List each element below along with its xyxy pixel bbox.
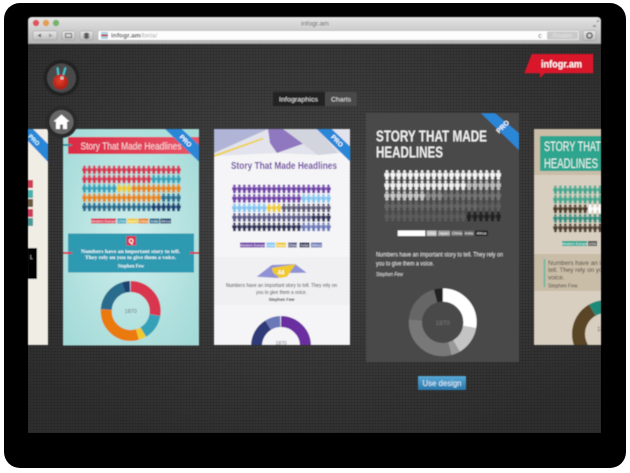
dark textured page background xyxy=(28,44,601,433)
legend: Japan xyxy=(127,220,137,224)
legend: Western Europe xyxy=(240,243,265,247)
PRO ribbon xyxy=(165,129,199,162)
quote block xyxy=(63,234,199,272)
home button xyxy=(46,106,78,138)
legend: Africa xyxy=(477,232,487,236)
back and forward buttons xyxy=(33,31,57,40)
polygon header art xyxy=(214,129,350,157)
legend: India xyxy=(151,220,158,224)
tab: Charts: Charts xyxy=(331,96,352,104)
donut chart, clipped xyxy=(250,316,312,346)
traffic light buttons xyxy=(33,20,59,26)
legend: Western Europe xyxy=(91,220,116,224)
share button xyxy=(62,31,75,40)
legend xyxy=(398,230,488,236)
PRO ribbon xyxy=(27,129,48,162)
template card: teal xyxy=(63,129,199,346)
template card: paper, cut off right xyxy=(533,128,602,346)
layers button xyxy=(80,31,93,40)
heading: STORY THAT MADE xyxy=(376,128,487,146)
use design button: Use design xyxy=(422,379,462,388)
people chart xyxy=(232,184,331,232)
browser chrome toolbar xyxy=(28,17,601,44)
legend: China xyxy=(288,243,297,247)
donut chart xyxy=(415,295,470,350)
connector to home xyxy=(63,144,72,146)
legend: USA xyxy=(118,220,126,224)
heading: STORY THAT xyxy=(544,139,601,154)
infogr.am red logo: infogr.am xyxy=(541,58,582,70)
heading: Story That Made Headlines xyxy=(80,140,182,152)
quote block: Stephen Few xyxy=(269,297,295,302)
quote block: tell. They rely on you to give xyxy=(548,267,627,274)
PRO ribbon: PRO xyxy=(178,134,193,149)
donut chart, clipped: 18 xyxy=(597,327,604,333)
legend: Japan xyxy=(439,232,449,236)
quote text: you to give them a voice. xyxy=(376,260,434,268)
legend xyxy=(91,218,171,224)
donut chart, clipped: 1870 xyxy=(275,341,287,347)
tab switcher xyxy=(273,92,357,106)
people chart xyxy=(384,170,502,222)
legend: Africa xyxy=(312,243,321,247)
PRO ribbon: PRO xyxy=(27,134,40,148)
quote block: Numbers have an important xyxy=(548,260,626,267)
legend: Japan xyxy=(276,243,286,247)
use design button xyxy=(418,376,466,390)
quote block: They rely on you to give them a voice. xyxy=(85,255,177,261)
quote block: Stephen Few xyxy=(548,284,578,290)
quote block: voice. xyxy=(548,274,565,282)
tab: Infographics: Infographics xyxy=(279,96,319,104)
legend: China xyxy=(139,220,148,224)
black tooltip tab: L xyxy=(30,255,33,261)
quote block: you to give them a voice. xyxy=(256,290,307,296)
address bar: Reader xyxy=(553,34,572,40)
legend: USA xyxy=(428,232,436,236)
black tooltip tab xyxy=(28,248,37,279)
people row fragments xyxy=(28,180,33,226)
settings button xyxy=(583,30,596,40)
people chart xyxy=(553,185,601,233)
legend: Africa xyxy=(161,220,170,224)
address bar xyxy=(98,30,579,40)
quote block: Numbers have an important story to tell. They rely on xyxy=(226,283,337,289)
legend: China xyxy=(452,232,463,236)
quote text xyxy=(376,252,503,278)
heading xyxy=(376,128,487,162)
PRO ribbon xyxy=(481,113,519,150)
partial template card far left xyxy=(27,129,48,345)
infogr.am red logo xyxy=(524,54,593,78)
PRO ribbon: PRO xyxy=(329,134,344,149)
legend: USA xyxy=(267,243,275,247)
PRO ribbon: PRO xyxy=(496,119,512,135)
legend: USA xyxy=(589,242,597,246)
PRO ribbon xyxy=(317,129,350,162)
template card: dark selected xyxy=(366,113,519,362)
legend xyxy=(240,242,322,248)
address bar: c xyxy=(538,33,542,40)
legend: Western Europe xyxy=(562,242,587,246)
app logo badge xyxy=(44,60,80,96)
quote block: Stephen Few xyxy=(118,264,145,270)
donut chart, clipped xyxy=(572,300,602,346)
quote block: Numbers have an important story to tell. xyxy=(81,249,181,255)
window title: infogr.am xyxy=(301,20,329,28)
address bar: infogr.am/beta/ xyxy=(111,32,157,40)
template card: white purple xyxy=(214,129,350,370)
legend: India xyxy=(465,232,474,236)
heading: Story That Made Headlines xyxy=(231,161,337,172)
quote block: Q xyxy=(129,238,134,245)
fullscreen icon xyxy=(593,19,599,27)
people chart xyxy=(82,165,181,212)
quote block: 44 xyxy=(278,270,285,276)
donut chart: 1870 xyxy=(125,309,137,315)
quote text: Numbers have an important story to tell. They rely on xyxy=(376,252,503,258)
quote block xyxy=(534,254,602,291)
heading: HEADLINES xyxy=(544,156,598,171)
quote text: Stephen Few xyxy=(376,272,403,278)
donut chart: 1870 xyxy=(435,320,450,327)
quote block xyxy=(214,257,350,305)
legend: India xyxy=(301,243,308,247)
heading: HEADLINES xyxy=(376,144,443,162)
donut chart xyxy=(106,286,155,336)
heading xyxy=(540,136,601,171)
icon: red bug mascot xyxy=(53,68,68,90)
icon: home xyxy=(54,114,70,129)
heading xyxy=(68,137,199,154)
legend xyxy=(562,241,597,246)
